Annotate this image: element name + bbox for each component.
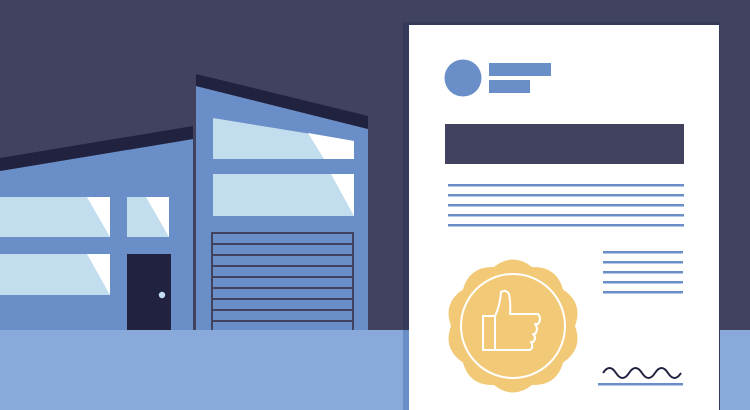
ground xyxy=(0,330,750,410)
left wing xyxy=(0,126,193,330)
windows left xyxy=(0,197,110,237)
door xyxy=(127,254,171,330)
garage door xyxy=(212,233,353,333)
title bar xyxy=(445,124,684,164)
text lines xyxy=(448,184,684,226)
document xyxy=(403,22,720,410)
seal with thumbs up xyxy=(449,260,577,392)
side text lines xyxy=(603,251,683,294)
avatar header xyxy=(444,60,551,96)
signature xyxy=(598,368,683,386)
tall wing xyxy=(196,74,368,333)
thumb xyxy=(483,291,540,350)
building xyxy=(0,74,368,333)
